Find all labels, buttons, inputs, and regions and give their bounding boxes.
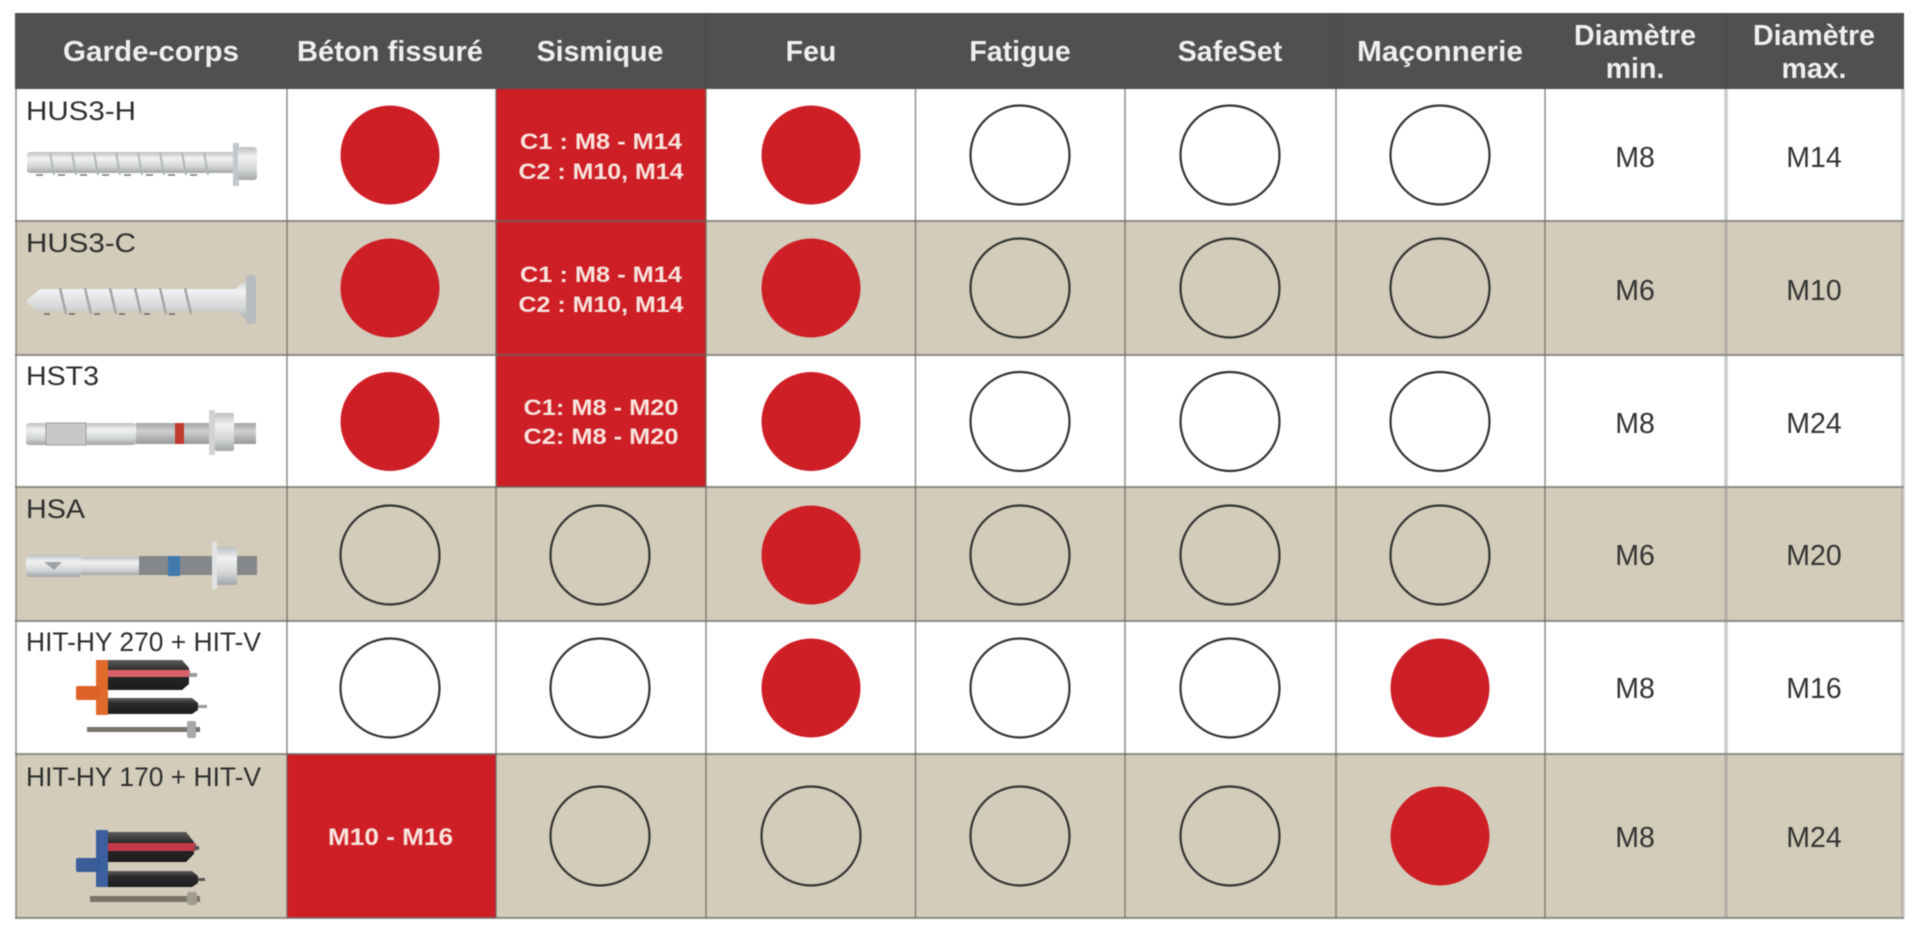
mark: Fatigue no (970, 372, 1070, 471)
icon: HIT-HY 170 cartridge and rod (76, 830, 205, 905)
mark: Sismique no (550, 786, 650, 886)
mark: Feu yes (762, 238, 860, 338)
mark: SafeSet no (1180, 372, 1280, 471)
cell: Sismique ranges (496, 355, 706, 487)
mark: SafeSet no (1180, 506, 1280, 604)
heading: Maçonnerie: Maçonnerie (1357, 36, 1523, 68)
value: diamètre min: M8 (1615, 142, 1655, 174)
value: diamètre max: M16 (1786, 673, 1842, 705)
product name: HUS3-H: HUS3-H (26, 96, 136, 126)
mark: Béton fissuré no (340, 638, 440, 738)
heading: Fatigue: Fatigue (969, 36, 1071, 68)
mark: Maçonnerie yes (1390, 638, 1490, 738)
mark: Sismique no (550, 638, 650, 738)
icon: HUS3-H screw anchor (27, 143, 257, 186)
row: HUS3-C (16, 221, 1903, 355)
value: diamètre max: M14 (1786, 142, 1842, 174)
cell: Sismique ranges: C1 : M8 - M14 (520, 129, 683, 154)
mark: Sismique no (550, 506, 650, 604)
mark: Béton fissuré yes (340, 106, 440, 204)
value: diamètre max: M20 (1786, 540, 1842, 572)
mark: SafeSet no (1180, 238, 1280, 338)
product name: HIT-HY 170 + HIT-V: HIT-HY 170 + HIT-V (26, 762, 261, 792)
heading: Béton fissuré: Béton fissuré (297, 36, 483, 68)
row: HIT-HY 170 + HIT-V (16, 754, 1903, 918)
mark: Feu yes (762, 106, 860, 204)
mark: Béton fissuré yes (340, 372, 440, 471)
heading: SafeSet: SafeSet (1178, 36, 1283, 68)
mark: Maçonnerie no (1390, 506, 1490, 604)
value: diamètre min: M6 (1615, 540, 1655, 572)
mark: Maçonnerie no (1390, 372, 1490, 471)
value: diamètre min: M8 (1615, 408, 1655, 440)
value: diamètre max: M24 (1786, 822, 1842, 854)
heading: Diamètre max.: max. (1782, 53, 1846, 85)
row: HIT-HY 270 + HIT-V (16, 621, 1903, 754)
row: HSA (16, 487, 1903, 621)
cell: Sismique ranges: C2 : M10, M14 (518, 292, 684, 317)
mark: SafeSet no (1180, 106, 1280, 204)
mark: Feu yes (762, 638, 860, 738)
mark: Feu yes (762, 506, 860, 604)
cell: Béton fissuré range (287, 754, 496, 918)
product name: HUS3-C: HUS3-C (26, 228, 136, 258)
value: diamètre min: M6 (1615, 275, 1655, 307)
icon: HSA wedge anchor (26, 542, 257, 589)
cell: Sismique ranges: C1 : M8 - M14 (520, 262, 683, 287)
heading: Feu: Feu (786, 36, 836, 68)
cell: Béton fissuré range: M10 - M16 (328, 824, 453, 851)
mark: Fatigue no (970, 106, 1070, 204)
cell: Sismique ranges: C1: M8 - M20 (524, 395, 678, 420)
value: diamètre min: M8 (1615, 822, 1655, 854)
mark: Béton fissuré yes (340, 238, 440, 338)
value: diamètre min: M8 (1615, 673, 1655, 705)
icon: HST3 wedge anchor (26, 410, 256, 455)
mark: Béton fissuré no (340, 506, 440, 604)
value: diamètre max: M10 (1786, 275, 1842, 307)
product name: HIT-HY 270 + HIT-V: HIT-HY 270 + HIT-V (26, 627, 261, 657)
value: diamètre max: M24 (1786, 408, 1842, 440)
heading: Diamètre max.: Diamètre (1753, 20, 1875, 52)
mark: Fatigue no (970, 638, 1070, 738)
mark: Maçonnerie yes (1390, 786, 1490, 886)
mark: Fatigue no (970, 786, 1070, 886)
icon: HIT-HY 270 cartridge and rod (76, 660, 207, 738)
mark: Maçonnerie no (1390, 238, 1490, 338)
row: HUS3-H (16, 89, 1903, 221)
mark: Fatigue no (970, 506, 1070, 604)
mark: Maçonnerie no (1390, 106, 1490, 204)
cell: Sismique ranges (496, 89, 706, 221)
cell: Sismique ranges (496, 221, 706, 355)
cell: Sismique ranges: C2: M8 - M20 (524, 424, 678, 449)
icon: HUS3-C screw anchor (26, 275, 256, 324)
header row (15, 13, 1904, 89)
heading: Diamètre min.: min. (1606, 53, 1664, 85)
product name: HSA: HSA (26, 494, 85, 524)
heading: Sismique: Sismique (537, 36, 663, 68)
heading: Garde-corps: Garde-corps (63, 36, 239, 68)
cell: Sismique ranges: C2 : M10, M14 (518, 159, 684, 184)
row: HST3 (16, 355, 1903, 487)
heading: Diamètre min.: Diamètre (1574, 20, 1696, 52)
mark: Feu no (762, 786, 860, 886)
mark: SafeSet no (1180, 786, 1280, 886)
mark: Fatigue no (970, 238, 1070, 338)
mark: SafeSet no (1180, 638, 1280, 738)
product name: HST3: HST3 (26, 361, 99, 391)
mark: Feu yes (762, 372, 860, 471)
